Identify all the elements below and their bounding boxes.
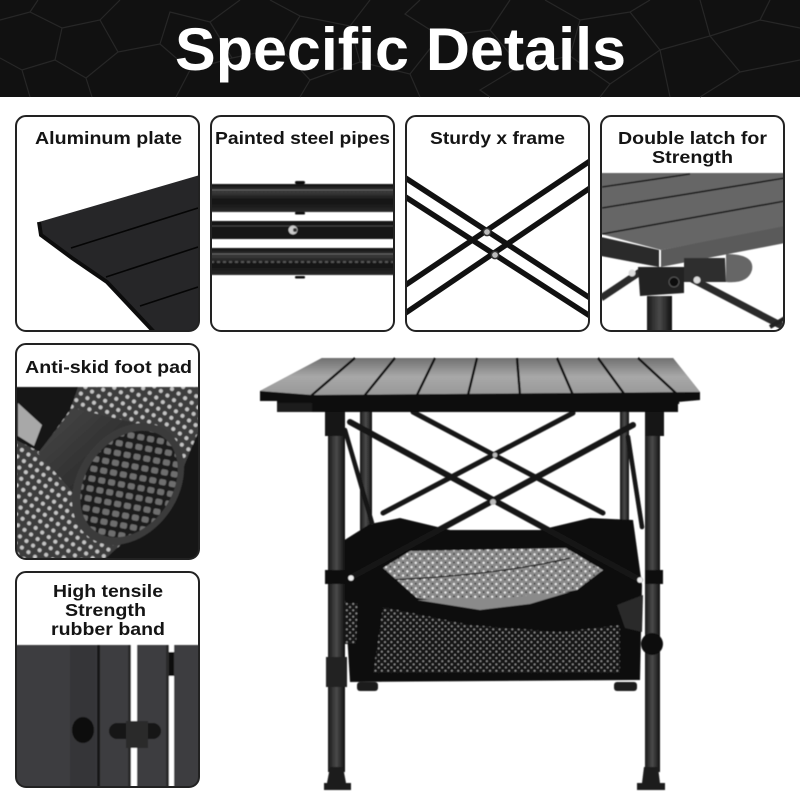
label: aluminum plate: Aluminum plate [35, 128, 182, 148]
label: anti-skid foot pad: Anti-skid foot pad [25, 357, 192, 377]
panel: sturdy x frame [404, 116, 590, 331]
label: double latch: Double latch for [618, 128, 767, 148]
header banner [0, 0, 800, 97]
title: Specific Details [175, 16, 626, 83]
panel: painted steel pipes [211, 116, 394, 331]
main table photo [260, 358, 700, 790]
label: painted steel pipes: Painted steel pipes [215, 128, 390, 148]
panel: aluminum plate [16, 116, 200, 332]
panel: rubber band [16, 572, 199, 787]
label: sturdy x frame: Sturdy x frame [430, 128, 565, 148]
label: strength: Strength [65, 600, 146, 620]
plate image [39, 175, 200, 332]
back legs [360, 410, 629, 530]
label: strength: Strength [652, 147, 733, 167]
storage net [343, 518, 643, 682]
label: rubber band: rubber band [51, 619, 165, 639]
x frame image [404, 161, 590, 316]
label: high tensile: High tensile [53, 581, 163, 601]
table top [260, 358, 700, 412]
panel: double latch [601, 116, 785, 332]
latch image [601, 173, 785, 332]
steel pipes image [211, 181, 394, 278]
x brace [345, 412, 643, 583]
foot pad image [16, 387, 207, 567]
front legs and feet [324, 412, 665, 790]
panel: anti-skid foot pad [16, 344, 207, 567]
rubber band image [16, 645, 199, 787]
